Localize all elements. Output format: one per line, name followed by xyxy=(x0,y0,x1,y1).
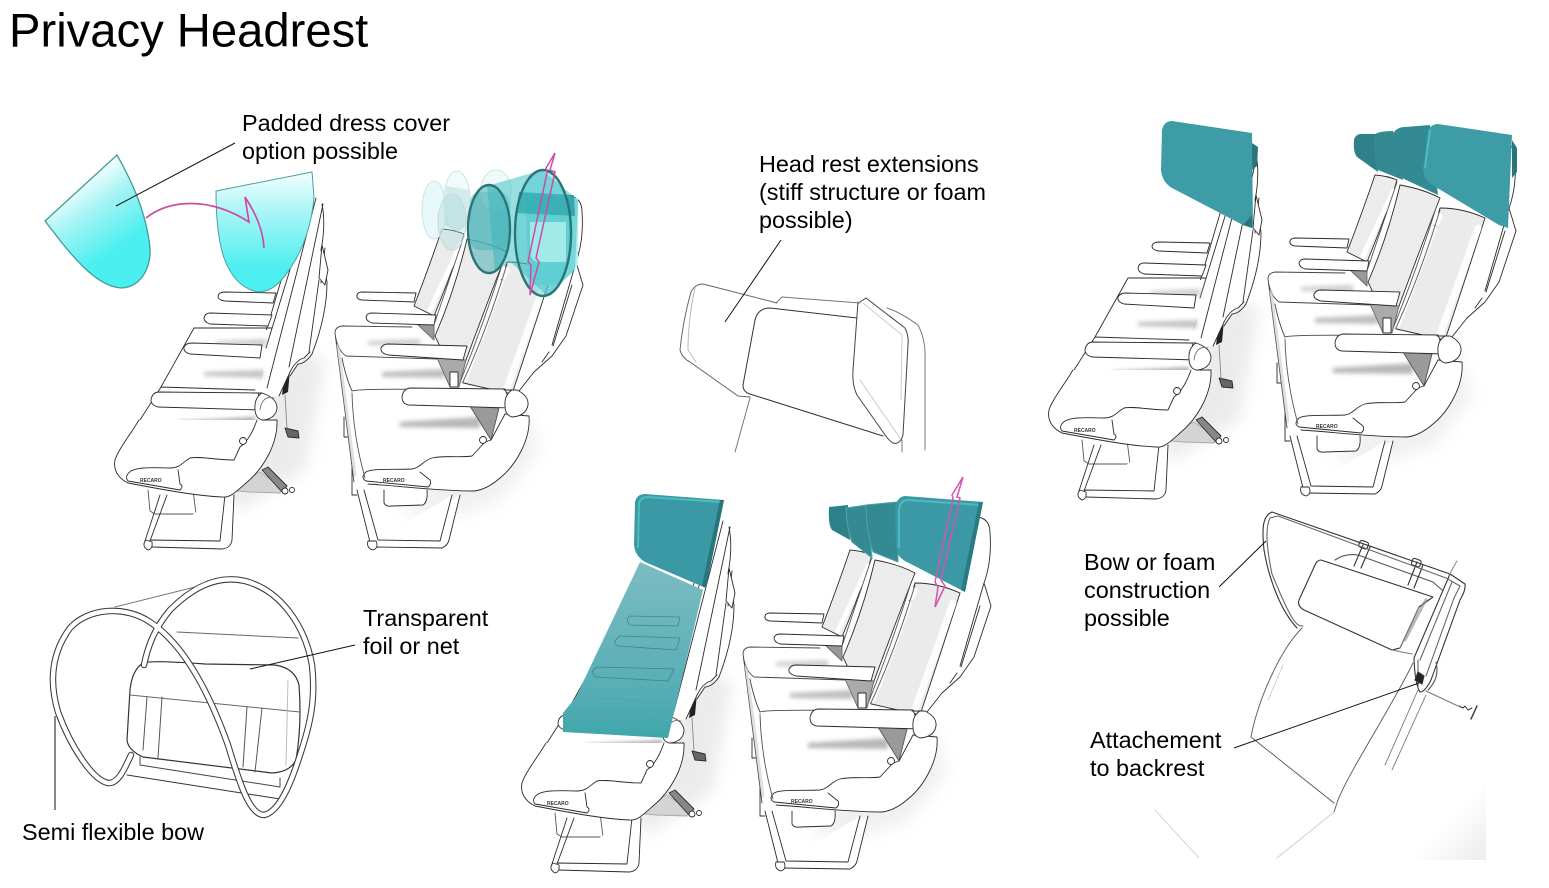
paper shading xyxy=(1400,770,1486,860)
icon: cover fitted on headrest xyxy=(216,172,314,292)
panel: bow attachment sketch xyxy=(1155,512,1486,860)
front extension panel xyxy=(1423,124,1517,228)
headrest extension panel xyxy=(1161,121,1258,228)
panel: extended headrest seat row front xyxy=(1268,124,1517,496)
label: padded dress cover xyxy=(116,110,450,206)
label: padded dress cover: Padded dress cover xyxy=(242,110,450,136)
seat row front view xyxy=(335,196,583,550)
panel: headrest extensions sketch xyxy=(680,284,925,452)
sketch: rear lines and headrest xyxy=(115,580,300,799)
sketch: backrest lines xyxy=(1155,628,1426,858)
seat row front view xyxy=(743,517,991,871)
rear extension panels xyxy=(1354,125,1438,195)
sketch: right wing xyxy=(853,298,908,443)
sketch: foam bow frame xyxy=(1263,512,1465,692)
label: bow or foam construction: construction xyxy=(1084,577,1210,603)
label: transparent foil or net: foil or net xyxy=(363,633,460,659)
label: semi flexible bow: Semi flexible bow xyxy=(22,819,204,845)
label: bow or foam construction: possible xyxy=(1084,605,1170,631)
rear extension panels xyxy=(829,502,898,562)
front extension panel xyxy=(895,496,983,592)
label: attachment to backrest: to backrest xyxy=(1090,755,1205,781)
armrest outlines through cover xyxy=(563,616,680,718)
sketch: measurement tick xyxy=(1426,561,1477,719)
sketch: backrest lines xyxy=(735,308,925,452)
label: head rest extensions: Head rest extensions xyxy=(759,151,979,177)
arrow: vertical adjustment xyxy=(935,477,963,607)
translucent cover on seat xyxy=(563,562,703,738)
seat row front view xyxy=(1268,142,1516,496)
label: attachment to backrest: Attachement xyxy=(1090,727,1222,753)
label: transparent foil or net xyxy=(250,605,489,669)
seat row side view xyxy=(1049,146,1262,500)
seat row side view xyxy=(522,519,735,873)
arrow: cover fitting direction xyxy=(146,197,264,248)
seat row side view xyxy=(115,196,328,550)
headrest extension panel xyxy=(634,494,724,588)
label: head rest extensions: possible) xyxy=(759,207,853,233)
panel: extended headrest seat row side xyxy=(1049,121,1262,500)
sketch: head pad xyxy=(1299,540,1442,654)
label: padded dress cover: option possible xyxy=(242,138,398,164)
title: Privacy Headrest xyxy=(9,4,368,58)
label: transparent foil or net: Transparent xyxy=(363,605,489,631)
label: head rest extensions: (stiff structure or foam xyxy=(759,179,986,205)
sketch: centre pad xyxy=(743,308,883,436)
panel: semi flexible bow sketch xyxy=(53,579,313,815)
icon: faded ovals xyxy=(422,170,511,250)
headrests xyxy=(444,186,578,285)
label: attachment to backrest xyxy=(1090,683,1419,781)
label: bow or foam construction: Bow or foam xyxy=(1084,549,1215,575)
panel: teal cover seat row xyxy=(522,494,735,873)
arrow: vertical adjustment xyxy=(528,153,555,295)
sketch: left wing xyxy=(680,284,777,397)
panel: padded dress cover concept xyxy=(45,110,450,550)
label: head rest extensions xyxy=(725,151,986,322)
icon: detached padded cover xyxy=(45,155,150,288)
label: bow or foam construction xyxy=(1084,541,1266,631)
panel: transparent ovals seat row xyxy=(335,153,583,550)
panel: headrest extensions seat row with arrow xyxy=(743,477,991,871)
icon: transparent oval cone xyxy=(468,170,578,296)
sketch: semi flexible bow xyxy=(53,579,313,815)
